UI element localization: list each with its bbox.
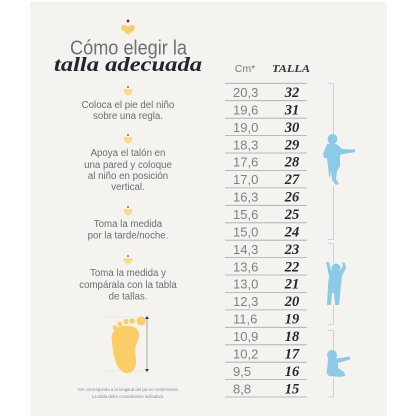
table header: TALLA [272, 63, 310, 75]
size column: 22 [284, 259, 299, 275]
step 1 [82, 86, 174, 122]
title [54, 38, 202, 76]
centimetre column: 17,0 [233, 172, 258, 187]
text: step 4: de tallas. [109, 292, 147, 302]
size column: 27 [284, 172, 300, 188]
size column: 17 [285, 346, 300, 362]
centimetre column [233, 85, 258, 396]
table header [235, 63, 310, 75]
text: step 4: Toma la medida y [90, 268, 166, 279]
centimetre column: 20,3 [233, 85, 258, 100]
icon: step 2 heart [123, 134, 133, 144]
centimetre column: 16,3 [233, 190, 258, 205]
text: step 2: al niño en posición [88, 171, 168, 182]
step 2 [84, 134, 172, 193]
centimetre column: 13,0 [233, 277, 258, 292]
step 3 [88, 206, 168, 242]
icon: step 4 heart [123, 255, 133, 265]
text: step 2: Apoya el talón en [91, 148, 165, 159]
centimetre column: 13,6 [233, 259, 258, 274]
title: Cómo elegir la [70, 38, 188, 60]
centimetre column: 19,0 [233, 120, 258, 135]
size column: 15 [285, 381, 299, 397]
centimetre column: 17,6 [233, 155, 258, 170]
size column: 23 [284, 242, 299, 258]
size column: 29 [284, 137, 299, 153]
centimetre column: 18,3 [233, 137, 258, 152]
centimetre column: 15,6 [233, 207, 258, 222]
icon: crawling baby [326, 350, 350, 377]
text: step 1: sobre una regla. [93, 111, 163, 122]
size column: 32 [284, 85, 299, 101]
size column: 19 [285, 312, 299, 328]
centimetre column: 10,9 [233, 329, 258, 344]
text: step 3: por la tarde/noche. [88, 230, 168, 242]
icon: standing child [323, 134, 355, 185]
table: size chart [225, 63, 310, 397]
size column: 24 [284, 224, 299, 240]
table rules [225, 83, 307, 397]
size column: 28 [284, 155, 300, 171]
size column: 16 [285, 364, 300, 380]
text: step 2: una pared y coloque [84, 160, 172, 171]
size column [284, 85, 300, 397]
centimetre column: 15,0 [233, 224, 258, 240]
title: talla adecuada [54, 54, 202, 76]
centimetre column: 12,3 [233, 294, 258, 309]
footnote: *cm corresponde a la longitud del pie en centímetros. [77, 387, 179, 392]
text: step 1: Coloca el pie del niño [82, 100, 174, 111]
size column: 30 [284, 120, 299, 136]
icon: toddler arms up [326, 262, 346, 305]
text: step 3: Toma la medida [94, 219, 163, 230]
step 4 [79, 255, 177, 302]
centimetre column: 19,6 [233, 102, 258, 117]
footnote: La tabla debe considerarse indicativa. [92, 394, 164, 399]
icon: step 1 heart [123, 86, 133, 96]
centimetre column: 9,5 [233, 364, 251, 379]
text: step 4: compárala con la tabla [79, 280, 177, 291]
height scale lines [328, 84, 334, 397]
icon: title heart [121, 20, 135, 35]
size column: 31 [284, 102, 299, 118]
icon: step 3 heart [123, 206, 133, 216]
table header: Cm* [235, 63, 255, 75]
centimetre column: 11,6 [233, 312, 257, 327]
text: step 2: vertical. [111, 182, 145, 193]
centimetre column: 10,2 [233, 346, 258, 362]
centimetre column: 8,8 [233, 381, 251, 396]
centimetre column: 14,3 [233, 242, 258, 257]
size column: 25 [284, 207, 299, 223]
size column: 26 [284, 190, 300, 206]
icon: foot with measure [104, 316, 149, 373]
size column: 21 [284, 277, 299, 293]
size column: 20 [284, 294, 299, 310]
size column: 18 [285, 329, 300, 345]
